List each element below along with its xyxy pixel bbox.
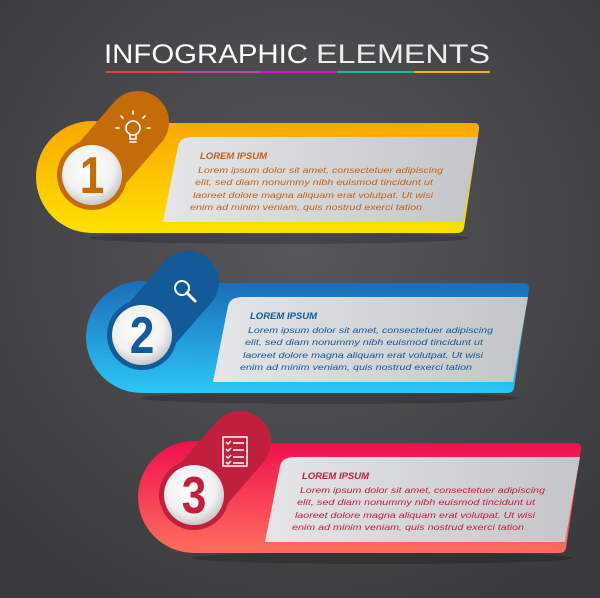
panel 1: laoreet dolore magna aliquam erat volutpat. Ut wisi: [193, 190, 434, 200]
number circle 2: [107, 300, 177, 370]
icon: checklist: [223, 437, 247, 466]
panel 2: Lorem ipsum dolor sit amet, consectetuer adipiscing: [248, 325, 493, 335]
panel 3: [138, 437, 581, 564]
panel 1: enim ad minim veniam, quis nostrud exerci tation: [190, 202, 422, 212]
number circle 1: [57, 140, 127, 210]
panel 2: enim ad minim veniam, quis nostrud exerci tation: [240, 362, 472, 372]
panel 2: LOREM IPSUM: [250, 311, 318, 322]
title: INFOGRAPHIC: [104, 39, 308, 69]
panel 1: Lorem ipsum dolor sit amet, consectetuer adipiscing: [198, 165, 443, 175]
number circle 2: 2: [130, 307, 154, 365]
icon: magnifier: [175, 281, 195, 301]
panel 3: Lorem ipsum dolor sit amet, consectetuer adipiscing: [300, 485, 545, 495]
panel 1: elit, sed diam nonummy nibh euismod tincidunt ut: [195, 177, 434, 187]
panel 1: LOREM IPSUM: [200, 151, 268, 162]
panel 2: [86, 281, 529, 404]
panel 3: elit, sed diam nonummy nibh euismod tincidunt ut: [297, 497, 536, 507]
panel 2: elit, sed diam nonummy nibh euismod tincidunt ut: [245, 337, 484, 347]
panel 3: laoreet dolore magna aliquam erat volutpat. Ut wisi: [295, 510, 536, 520]
number circle 3: 3: [182, 467, 206, 525]
panel 3: enim ad minim veniam, quis nostrud exerci tation: [292, 522, 524, 532]
panel 3: LOREM IPSUM: [302, 471, 370, 482]
number circle 3: [159, 460, 229, 530]
panel 2: laoreet dolore magna aliquam erat volutpat. Ut wisi: [243, 350, 484, 360]
panel 1: [36, 111, 479, 244]
icon: light bulb: [116, 111, 150, 142]
title: [104, 39, 490, 73]
number circle 1: 1: [80, 147, 104, 205]
title: ELEMENTS: [316, 39, 490, 69]
